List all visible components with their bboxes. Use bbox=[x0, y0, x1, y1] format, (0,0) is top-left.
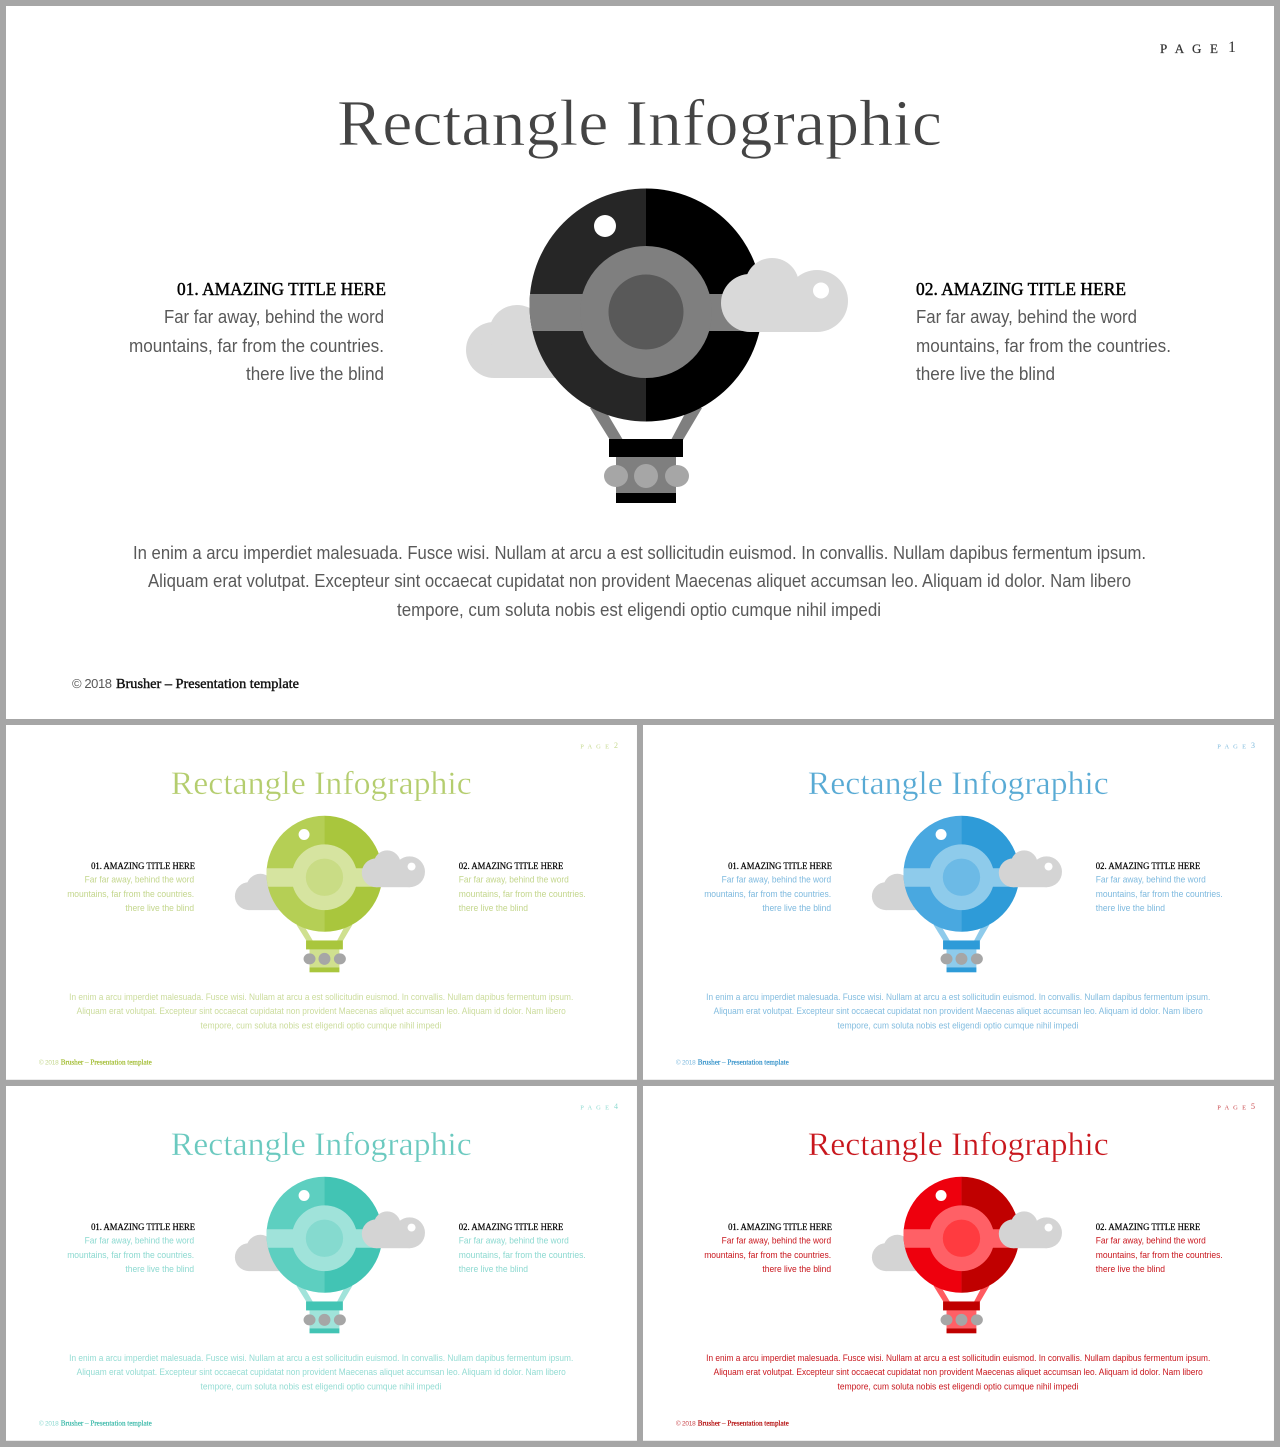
icon: hot air balloon with clouds bbox=[235, 816, 425, 972]
text block: left: mountains, far from the countries. bbox=[704, 1250, 831, 1260]
text block: right: 02. AMAZING TITLE HERE bbox=[916, 279, 1126, 299]
panel: page 5 red bbox=[643, 1086, 1274, 1441]
text block: right bbox=[459, 1222, 586, 1274]
text block: description: tempore, cum soluta nobis est eligendi optio cumque nihil impedi bbox=[201, 1382, 441, 1392]
text block: left: Far far away, behind the word bbox=[722, 1236, 831, 1246]
text block: right: Far far away, behind the word bbox=[459, 1236, 569, 1246]
page label bbox=[580, 1102, 618, 1111]
footer: © 2018 bbox=[39, 1419, 59, 1427]
text block: right: mountains, far from the countries. bbox=[1096, 1250, 1223, 1260]
page label bbox=[1217, 741, 1255, 750]
text block: left: 01. AMAZING TITLE HERE bbox=[728, 1222, 833, 1232]
footer: Brusher – Presentation template bbox=[698, 1058, 789, 1066]
title: Rectangle Infographic bbox=[171, 766, 472, 802]
panel: page 3 blue bbox=[643, 725, 1274, 1080]
text block: right: 02. AMAZING TITLE HERE bbox=[459, 861, 564, 871]
text block: description: Aliquam erat volutpat. Excepteur sint occaecat cupidatat non provident Maecenas aliquet accumsan leo. Aliquam id dolor. Nam libero bbox=[148, 571, 1131, 591]
page label: 2 bbox=[614, 741, 618, 750]
text block: right: there live the blind bbox=[459, 1264, 528, 1274]
text block: left: 01. AMAZING TITLE HERE bbox=[177, 279, 386, 299]
page label: 3 bbox=[1251, 741, 1255, 750]
title: Rectangle Infographic bbox=[808, 766, 1109, 802]
text block: right: mountains, far from the countries. bbox=[916, 336, 1171, 356]
text block: right bbox=[459, 861, 586, 913]
text block: right: mountains, far from the countries. bbox=[1096, 889, 1223, 899]
text block: description: tempore, cum soluta nobis est eligendi optio cumque nihil impedi bbox=[838, 1382, 1078, 1392]
text block: right: there live the blind bbox=[459, 903, 528, 913]
text block: left: Far far away, behind the word bbox=[164, 307, 384, 327]
text block: description: tempore, cum soluta nobis est eligendi optio cumque nihil impedi bbox=[397, 600, 881, 620]
text block: description: In enim a arcu imperdiet malesuada. Fusce wisi. Nullam at arcu a est sollicitudin euismod. In convallis. Nullam dapibus fermentum ipsum. bbox=[69, 1353, 573, 1363]
text block: left bbox=[129, 279, 386, 384]
text block: right: mountains, far from the countries. bbox=[459, 1250, 586, 1260]
icon: hot air balloon with clouds bbox=[466, 188, 848, 503]
panel: page 2 green bbox=[6, 725, 637, 1080]
text block: left: there live the blind bbox=[762, 903, 831, 913]
text block: description: Aliquam erat volutpat. Excepteur sint occaecat cupidatat non provident Maecenas aliquet accumsan leo. Aliquam id dolor. Nam libero bbox=[77, 1006, 566, 1016]
footer: © 2018 bbox=[676, 1058, 696, 1066]
text block: right: Far far away, behind the word bbox=[459, 875, 569, 885]
text block: left: Far far away, behind the word bbox=[722, 875, 831, 885]
text block: description bbox=[706, 992, 1210, 1031]
page label bbox=[1160, 39, 1236, 56]
page label: 5 bbox=[1251, 1102, 1255, 1111]
title: Rectangle Infographic bbox=[808, 1127, 1109, 1163]
text block: left bbox=[67, 1222, 196, 1274]
text block: description: Aliquam erat volutpat. Excepteur sint occaecat cupidatat non provident Maecenas aliquet accumsan leo. Aliquam id dolor. Nam libero bbox=[714, 1367, 1203, 1377]
icon: hot air balloon with clouds bbox=[235, 1177, 425, 1333]
text block: description: Aliquam erat volutpat. Excepteur sint occaecat cupidatat non provident Maecenas aliquet accumsan leo. Aliquam id dolor. Nam libero bbox=[714, 1006, 1203, 1016]
icon: hot air balloon with clouds bbox=[872, 816, 1062, 972]
text block: right: mountains, far from the countries. bbox=[459, 889, 586, 899]
text block: description: In enim a arcu imperdiet malesuada. Fusce wisi. Nullam at arcu a est sollicitudin euismod. In convallis. Nullam dapibus fermentum ipsum. bbox=[133, 543, 1146, 563]
text block: right: Far far away, behind the word bbox=[1096, 1236, 1206, 1246]
footer: Brusher – Presentation template bbox=[116, 677, 299, 692]
text block: left bbox=[67, 861, 196, 913]
text block: left: mountains, far from the countries. bbox=[704, 889, 831, 899]
text block: description: Aliquam erat volutpat. Excepteur sint occaecat cupidatat non provident Maecenas aliquet accumsan leo. Aliquam id dolor. Nam libero bbox=[77, 1367, 566, 1377]
text block: right: 02. AMAZING TITLE HERE bbox=[1096, 1222, 1201, 1232]
title: Rectangle Infographic bbox=[337, 87, 942, 160]
page label bbox=[1217, 1102, 1255, 1111]
text block: left: there live the blind bbox=[762, 1264, 831, 1274]
page label: P A G E bbox=[1160, 41, 1218, 56]
text block: description: In enim a arcu imperdiet malesuada. Fusce wisi. Nullam at arcu a est sollicitudin euismod. In convallis. Nullam dapibus fermentum ipsum. bbox=[706, 1353, 1210, 1363]
text block: left bbox=[704, 861, 833, 913]
page label: 1 bbox=[1228, 39, 1236, 56]
footer: Brusher – Presentation template bbox=[698, 1419, 789, 1427]
text block: right: Far far away, behind the word bbox=[916, 307, 1137, 327]
text block: description bbox=[69, 1353, 573, 1392]
text block: left: there live the blind bbox=[246, 364, 384, 384]
text block: left: 01. AMAZING TITLE HERE bbox=[91, 861, 196, 871]
text block: right: there live the blind bbox=[1096, 1264, 1165, 1274]
footer: Brusher – Presentation template bbox=[61, 1419, 152, 1427]
text block: right bbox=[916, 279, 1171, 384]
footer: © 2018 bbox=[72, 676, 112, 691]
text block: left: Far far away, behind the word bbox=[85, 875, 194, 885]
page label: 4 bbox=[614, 1102, 618, 1111]
text block: description: tempore, cum soluta nobis est eligendi optio cumque nihil impedi bbox=[201, 1021, 441, 1031]
page label: P A G E bbox=[1217, 1104, 1246, 1111]
text block: left: mountains, far from the countries. bbox=[67, 1250, 194, 1260]
text block: left: Far far away, behind the word bbox=[85, 1236, 194, 1246]
text block: description: In enim a arcu imperdiet malesuada. Fusce wisi. Nullam at arcu a est sollicitudin euismod. In convallis. Nullam dapibus fermentum ipsum. bbox=[69, 992, 573, 1002]
text block: left: 01. AMAZING TITLE HERE bbox=[91, 1222, 196, 1232]
text block: left: 01. AMAZING TITLE HERE bbox=[728, 861, 833, 871]
page label: P A G E bbox=[1217, 743, 1246, 750]
text block: left: there live the blind bbox=[125, 1264, 194, 1274]
footer: © 2018 bbox=[676, 1419, 696, 1427]
text block: description bbox=[133, 543, 1146, 620]
text block: left: there live the blind bbox=[125, 903, 194, 913]
page label: P A G E bbox=[580, 743, 609, 750]
panel: page 1 grey bbox=[6, 6, 1274, 719]
text block: right: Far far away, behind the word bbox=[1096, 875, 1206, 885]
text block: description bbox=[706, 1353, 1210, 1392]
text block: description: In enim a arcu imperdiet malesuada. Fusce wisi. Nullam at arcu a est sollicitudin euismod. In convallis. Nullam dapibus fermentum ipsum. bbox=[706, 992, 1210, 1002]
text block: right bbox=[1096, 1222, 1223, 1274]
text block: right bbox=[1096, 861, 1223, 913]
text block: description: tempore, cum soluta nobis est eligendi optio cumque nihil impedi bbox=[838, 1021, 1078, 1031]
page label bbox=[580, 741, 618, 750]
text block: right: 02. AMAZING TITLE HERE bbox=[459, 1222, 564, 1232]
icon: hot air balloon with clouds bbox=[872, 1177, 1062, 1333]
text block: right: 02. AMAZING TITLE HERE bbox=[1096, 861, 1201, 871]
panel: page 4 teal bbox=[6, 1086, 637, 1441]
text block: right: there live the blind bbox=[1096, 903, 1165, 913]
text block: left bbox=[704, 1222, 833, 1274]
text block: description bbox=[69, 992, 573, 1031]
text block: left: mountains, far from the countries. bbox=[129, 336, 384, 356]
footer: Brusher – Presentation template bbox=[61, 1058, 152, 1066]
footer: © 2018 bbox=[39, 1058, 59, 1066]
text block: right: there live the blind bbox=[916, 364, 1055, 384]
text block: left: mountains, far from the countries. bbox=[67, 889, 194, 899]
title: Rectangle Infographic bbox=[171, 1127, 472, 1163]
page label: P A G E bbox=[580, 1104, 609, 1111]
